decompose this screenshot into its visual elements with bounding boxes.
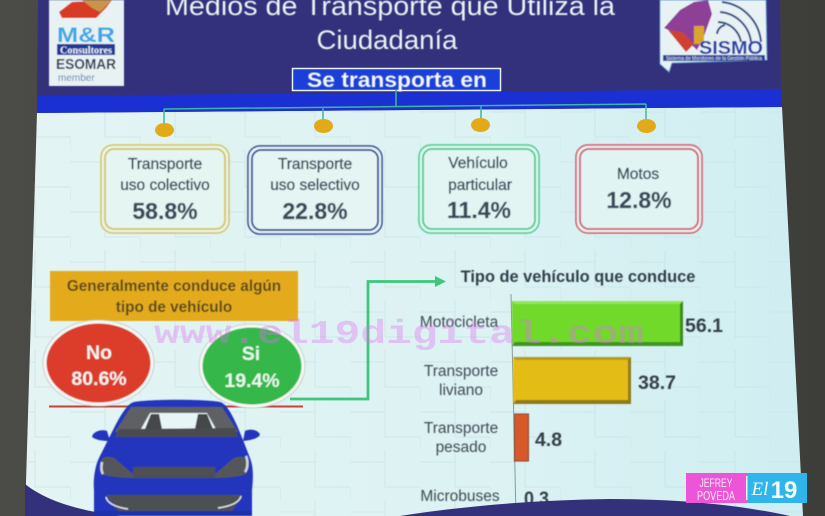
bar: Transporte pesado 4.8 [424, 414, 562, 461]
card: Transporte uso selectivo: uso selectivo [270, 177, 360, 194]
bar: Transporte liviano 38.7: liviano [439, 382, 483, 399]
baseline under answers [49, 406, 303, 408]
logo: SISMO: Sistema de Monitoreo de la Gestión Pública [666, 56, 762, 62]
card: Vehículo particular: particular [448, 177, 512, 194]
bar: Microbuses 0.3 [420, 488, 549, 510]
bar: Microbuses 0.3: Microbuses [420, 488, 500, 505]
oval: Si 19.4%: Si [242, 343, 260, 365]
watermark: www.el19digital.com: www.el19digital.com [154, 316, 644, 353]
card: Transporte uso selectivo [248, 146, 382, 234]
logo: M&R Consultores ESOMAR: M&R [57, 24, 115, 47]
bottom-left dark blue curve [25, 484, 120, 516]
oval: No 80.6%: No [86, 342, 112, 364]
bar chart: tipo de vehículo [420, 294, 723, 516]
bar: Transporte pesado 4.8: 4.8 [535, 430, 562, 451]
bar: Transporte liviano 38.7 [424, 357, 676, 404]
heading: Se transporta en: Se transporta en [307, 69, 487, 92]
arrow: Si to vehicle type [290, 276, 446, 399]
logo: SISMO: SISMO [699, 38, 763, 58]
bar: Motocicleta 56.1: Motocicleta [420, 314, 499, 331]
card: Motos: Motos [617, 166, 659, 183]
panel: projected slide content background [25, 107, 803, 516]
card: Transporte uso colectivo: uso colectivo [120, 177, 210, 194]
logo: M&R Consultores ESOMAR: member [58, 73, 95, 84]
card: Transporte uso selectivo: Transporte [278, 156, 352, 173]
badge: Jefrey Poveda El 19 [686, 473, 807, 504]
bar: Transporte pesado 4.8: pesado [436, 439, 486, 456]
card: Vehículo particular: 11.4% [447, 197, 511, 223]
card: Transporte uso colectivo [101, 145, 229, 233]
logo: M&R Consultores ESOMAR: Consultores [60, 46, 112, 56]
card: Vehículo particular [419, 145, 539, 233]
bar: Transporte liviano 38.7: Transporte [424, 363, 498, 380]
oval: No 80.6%: 80.6% [71, 368, 127, 390]
connector tree [164, 90, 646, 124]
connector dots [155, 118, 656, 137]
oval: No 80.6% [43, 320, 154, 406]
title: Ciudadanía [316, 25, 458, 55]
logo: M&R Consultores ESOMAR [49, 0, 124, 86]
oval: Si 19.4% [199, 324, 305, 408]
bar: Motocicleta 56.1 [420, 301, 723, 346]
logo: M&R Consultores ESOMAR: ESOMAR [56, 56, 116, 73]
icon: blue car [92, 400, 260, 516]
card: Vehículo particular: Vehículo [448, 155, 508, 172]
bar: Transporte liviano 38.7: 38.7 [638, 373, 676, 394]
bottom dark blue curve [400, 499, 790, 516]
bar: Motocicleta 56.1: 56.1 [685, 316, 723, 337]
card: Motos: 12.8% [606, 187, 672, 213]
badge: Jefrey Poveda El 19: 19 [771, 477, 797, 504]
header blue band [37, 89, 782, 113]
panel: dark blue header [37, 0, 781, 96]
card: Transporte uso colectivo: 58.8% [132, 198, 198, 224]
bar: Microbuses 0.3: 0.3 [524, 489, 549, 510]
bar: Transporte pesado 4.8: Transporte [424, 420, 498, 437]
badge: Jefrey Poveda El 19: POVEDA [697, 488, 735, 503]
card: Transporte uso selectivo: 22.8% [282, 198, 348, 224]
banner: Generalmente conduce algún tipo de vehículo: Generalmente conduce algún [67, 278, 281, 295]
chart axis [511, 294, 516, 516]
badge: Jefrey Poveda El 19: JEFREY [700, 476, 732, 490]
banner: Generalmente conduce algún tipo de vehículo [50, 271, 298, 321]
title [165, 0, 615, 55]
card: Transporte uso colectivo: Transporte [128, 156, 202, 173]
heading: Tipo de vehículo que conduce: Tipo de vehículo que conduce [461, 268, 695, 286]
card: Motos [576, 145, 702, 233]
oval: Si 19.4%: 19.4% [224, 370, 280, 392]
logo: SISMO [660, 0, 767, 72]
badge: Jefrey Poveda El 19: El [751, 479, 768, 500]
banner: Generalmente conduce algún tipo de vehículo: tipo de vehículo [116, 299, 232, 316]
